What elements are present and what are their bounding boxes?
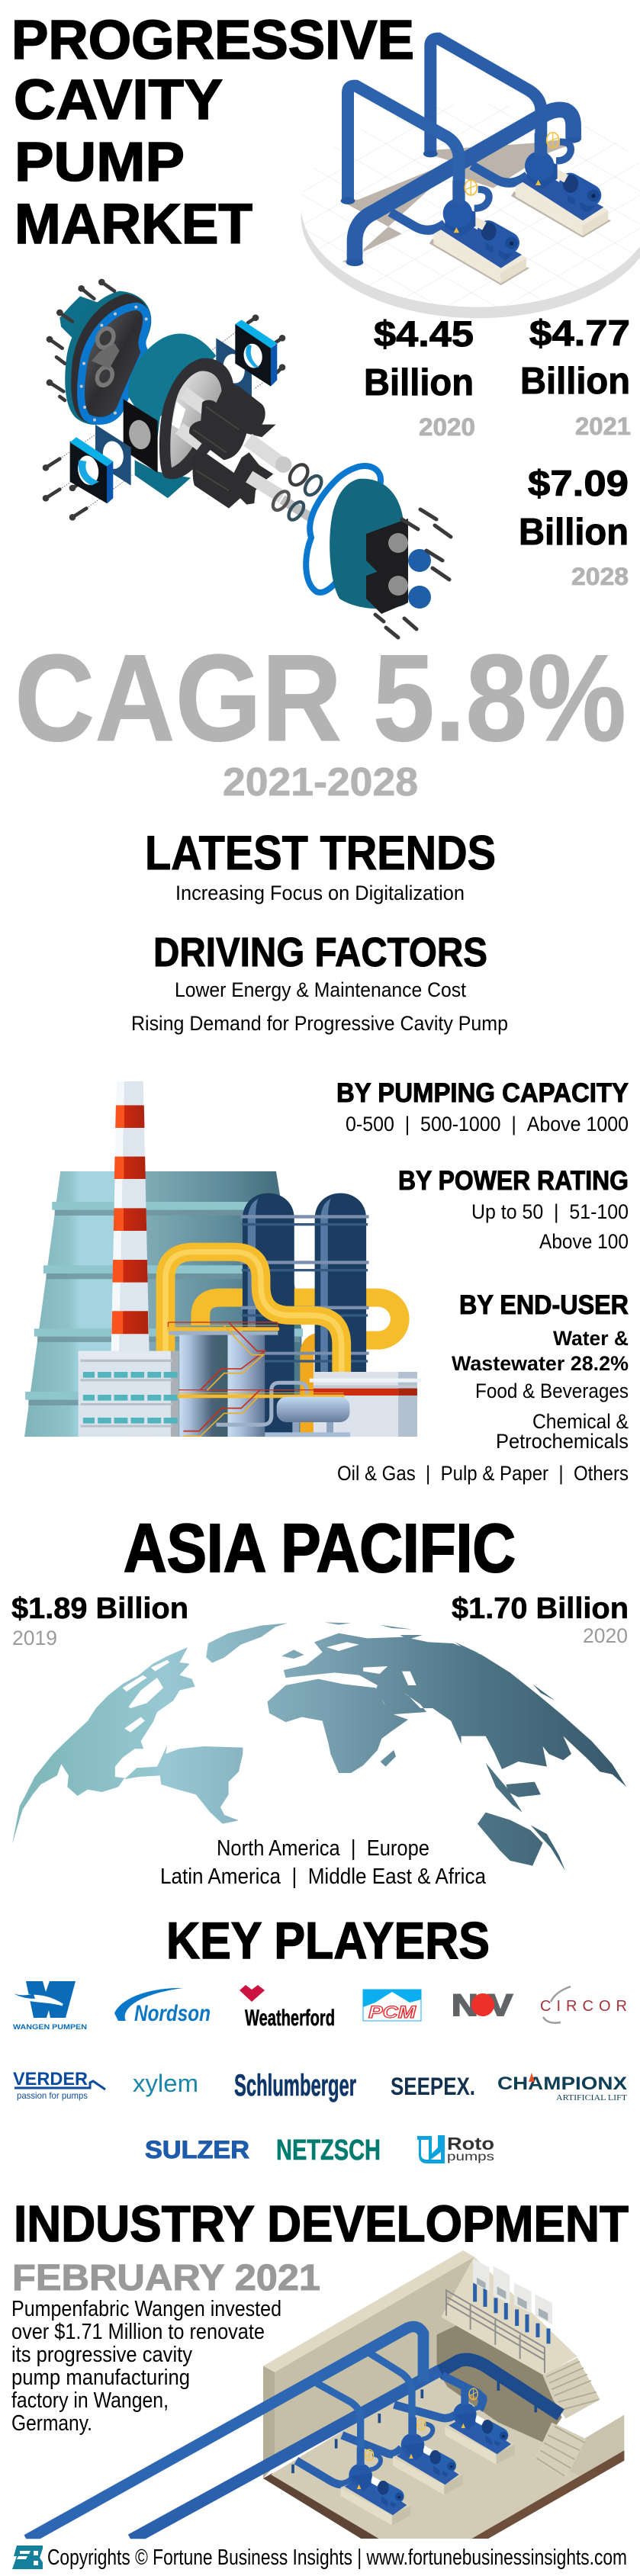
logo: Circor: CIRCOR — [540, 1998, 627, 2015]
driving factors — [131, 930, 508, 1035]
British Isles — [281, 1649, 304, 1659]
illustration: underground pump room — [0, 2250, 640, 2569]
market size 2028 — [519, 463, 629, 590]
upper main pipe — [27, 2327, 423, 2540]
market size 2028: $7.09 — [528, 463, 629, 503]
Australia — [478, 1813, 543, 1866]
Greenland — [206, 1623, 288, 1663]
by end-user: Wastewater 28.2% — [452, 1352, 629, 1375]
logo: Weatherford — [240, 1985, 335, 2031]
title: CAVITY — [14, 68, 223, 131]
driving factors: Rising Demand for Progressive Cavity Pump — [131, 1012, 508, 1035]
illustration: industrial plant — [24, 1081, 421, 1437]
floor — [271, 2374, 624, 2539]
back wall shadow — [436, 2317, 562, 2443]
logo: Weatherford: Weatherford — [245, 2006, 335, 2031]
front pipe — [348, 86, 459, 206]
other regions — [160, 1836, 487, 1889]
cooling tower — [24, 1171, 303, 1437]
right block — [549, 2415, 624, 2476]
housing — [95, 333, 234, 498]
logo: Verder: VERDER — [13, 2069, 88, 2089]
pump unit 1 — [429, 180, 529, 285]
by end-user: BY END-USER — [459, 1290, 629, 1320]
world map globe — [12, 1622, 626, 1871]
main diagonal pipe — [355, 110, 574, 262]
shaft end — [275, 457, 291, 473]
title — [11, 10, 414, 255]
development date: FEBRUARY 2021 — [12, 2258, 320, 2298]
Asia Pacific 2020 value — [452, 1592, 629, 1647]
Eurasia — [284, 1633, 626, 1787]
Asia Pacific 2019 value: $1.89 Billion — [11, 1592, 188, 1625]
market size 2020: 2020 — [419, 413, 475, 441]
floor shadows — [341, 136, 582, 265]
other regions: Latin America | Middle East & Africa — [160, 1865, 487, 1889]
rear shafts — [179, 393, 211, 445]
logo: Seepex: SEEPEX. — [391, 2073, 475, 2100]
seals — [270, 461, 325, 522]
logo: NOV: N V — [452, 1989, 513, 2022]
market size 2020: $4.45 — [374, 313, 474, 354]
development description: factory in Wangen, — [11, 2388, 169, 2413]
title: PROGRESSIVE — [11, 10, 414, 71]
central column — [167, 1322, 279, 1437]
South America — [159, 1746, 243, 1824]
market size 2021: Billion — [520, 361, 630, 402]
by end-user: Water & — [553, 1327, 629, 1350]
development description: its progressive cavity — [11, 2343, 192, 2367]
logo: Roto pumps: Roto — [447, 2134, 494, 2154]
market size 2021: 2021 — [575, 413, 631, 440]
lower main pipe — [131, 2370, 440, 2540]
logo: Roto pumps: pumps — [447, 2150, 494, 2163]
back pipe — [430, 39, 541, 158]
market size 2021 — [520, 313, 631, 440]
market size 2028: Billion — [519, 512, 629, 553]
lower yellow riser — [307, 1340, 317, 1434]
logo: ChampionX: ARTIFICIAL LIFT — [556, 2093, 627, 2102]
market size 2020: Billion — [364, 362, 474, 403]
driving factors: Lower Energy & Maintenance Cost — [175, 978, 466, 1001]
illustration: twin pump station on circular platform — [301, 39, 640, 318]
logo: Xylem: xylem — [133, 2070, 198, 2097]
dotted guide lines — [59, 323, 277, 509]
port openings — [366, 519, 408, 614]
development description — [11, 2297, 281, 2436]
market size 2021: $4.77 — [529, 313, 630, 353]
logo: Verder: passion for pumps — [17, 2090, 88, 2101]
suction pipes — [296, 2375, 482, 2484]
pump unit 3 — [445, 2387, 515, 2465]
title: PUMP — [14, 132, 185, 193]
market size 2028: 2028 — [571, 563, 629, 590]
Africa — [267, 1679, 408, 1773]
left wall — [263, 2250, 577, 2478]
key players heading: KEY PLAYERS — [166, 1912, 490, 1970]
rotor gears — [189, 384, 276, 509]
front yellow pipe — [166, 1252, 342, 1373]
footer logo — [12, 2545, 43, 2569]
pump unit 2 — [511, 133, 611, 238]
pipe feet — [341, 137, 581, 266]
Arctic islands — [324, 1622, 555, 1701]
logo: Sulzer: SULZER — [145, 2136, 249, 2163]
logo: ChampionX: CHAMPIONX — [497, 2073, 627, 2094]
lower platform — [177, 1390, 345, 1398]
right gasket — [216, 338, 252, 404]
logo: PCM: PCM — [368, 2003, 416, 2022]
by pumping capacity — [336, 1078, 629, 1135]
logo: ChampionX — [497, 2073, 627, 2102]
left building — [79, 1351, 178, 1437]
logo: Wangen Pumpen: WANGEN PUMPEN — [13, 2023, 87, 2032]
logo: Nordson — [114, 1988, 211, 2026]
chimney — [111, 1081, 150, 1351]
Madagascar — [381, 1750, 396, 1767]
bolts — [375, 509, 451, 638]
other regions: North America | Europe — [217, 1836, 429, 1861]
risers — [317, 2353, 412, 2467]
logo: PCM — [363, 1990, 421, 2022]
Caribbean and Central America — [124, 1745, 167, 1779]
by end-user: Chemical & — [532, 1410, 629, 1433]
by end-user — [337, 1290, 629, 1485]
title: MARKET — [14, 192, 252, 255]
horizontal tank — [265, 1397, 350, 1437]
by power rating: Up to 50 | 51-100 — [471, 1200, 629, 1223]
dark towers — [240, 1193, 369, 1436]
regional heading: ASIA PACIFIC — [124, 1511, 516, 1587]
pump unit 2 — [393, 2417, 463, 2495]
by pumping capacity: BY PUMPING CAPACITY — [336, 1078, 629, 1108]
platform disc — [301, 104, 640, 318]
market size 2020 — [364, 313, 475, 441]
development description: over $1.71 Million to renovate — [11, 2320, 265, 2344]
logo: Circor — [540, 1987, 627, 2023]
left flange — [70, 437, 113, 504]
stairways — [183, 1323, 265, 1436]
bolts — [46, 282, 282, 517]
latest trends — [145, 827, 496, 904]
Indonesia and Philippines — [486, 1763, 565, 1871]
pipe supports — [293, 2381, 535, 2473]
small gas pipe — [216, 1383, 307, 1425]
CAGR period: 2021-2028 — [223, 760, 418, 805]
by power rating: Above 100 — [539, 1230, 629, 1253]
rear cover — [59, 291, 151, 425]
by end-user: Petrochemicals — [496, 1430, 629, 1453]
suction pipes — [391, 165, 528, 230]
Asia Pacific 2020 value: 2020 — [583, 1624, 628, 1647]
bearings — [408, 549, 431, 609]
rear yellow pipe — [201, 1298, 400, 1341]
logo: Nordson: Nordson — [134, 2001, 211, 2026]
development description: Pumpenfabric Wangen invested — [11, 2297, 281, 2321]
logo: Netzsch: NETZSCH — [276, 2134, 381, 2166]
brown foundation — [263, 2450, 624, 2539]
logo: Wangen Pumpen — [13, 1981, 87, 2032]
control cabinets — [473, 2259, 552, 2343]
illustration: exploded pump, inlet side — [46, 282, 330, 530]
development description: Germany. — [11, 2411, 92, 2436]
latest trends: Increasing Focus on Digitalization — [175, 882, 465, 904]
Asia Pacific 2020 value: $1.70 Billion — [452, 1592, 629, 1625]
logo: Roto pumps — [417, 2134, 494, 2163]
development description: pump manufacturing — [11, 2366, 190, 2390]
pump unit 1 — [341, 2448, 410, 2526]
driving factors: DRIVING FACTORS — [153, 930, 487, 975]
gasket — [306, 466, 381, 593]
Asia Pacific 2019 value: 2019 — [12, 1627, 57, 1649]
teal cover — [330, 479, 408, 609]
railing — [446, 2290, 545, 2373]
by power rating — [398, 1166, 629, 1253]
dark return pipe — [437, 2359, 561, 2415]
logo: Verder — [13, 2069, 105, 2101]
Asia Pacific 2019 value — [11, 1592, 188, 1649]
front shafts — [248, 440, 330, 530]
logo: Schlumberger: Schlumberger — [234, 2069, 356, 2102]
latest trends: LATEST TRENDS — [145, 827, 496, 880]
right flange — [235, 320, 277, 387]
stairs — [534, 2358, 600, 2478]
illustration: exploded pump, outlet cover — [306, 466, 451, 638]
right building — [310, 1372, 421, 1437]
bottom mask — [0, 2539, 640, 2569]
North America — [12, 1647, 195, 1844]
